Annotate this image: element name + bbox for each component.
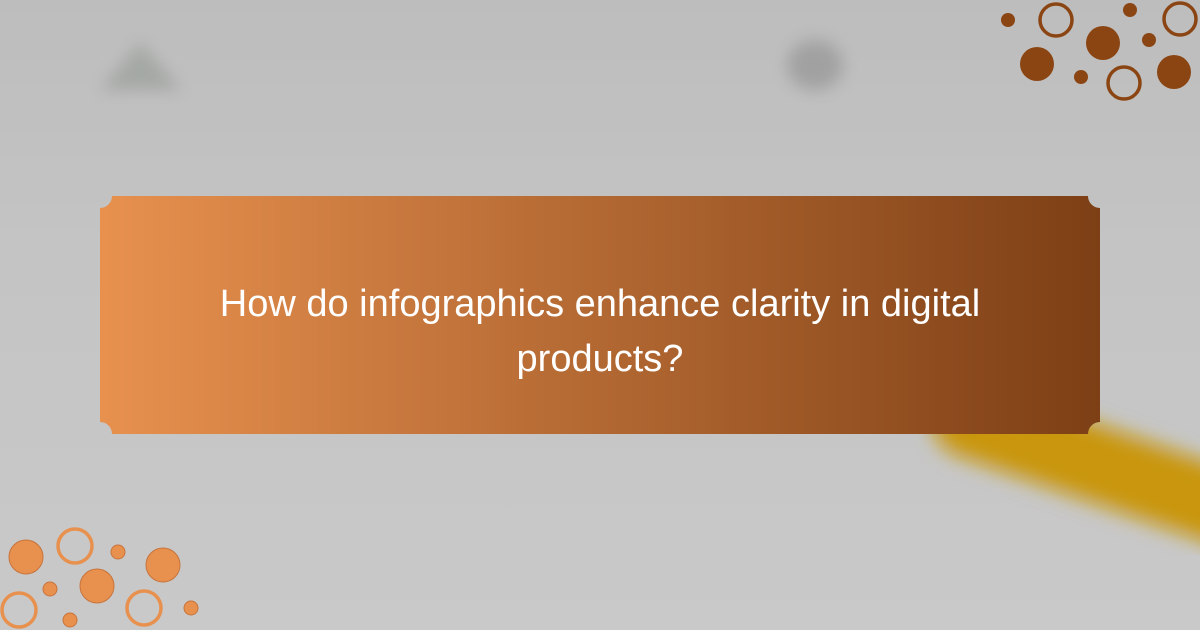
title: products? (517, 338, 683, 380)
title: How do infographics enhance clarity in digital (220, 283, 980, 325)
decoration: bottom-left circles (0, 527, 198, 629)
title (220, 283, 980, 380)
yellow streak (970, 420, 1200, 510)
banner (100, 196, 1100, 434)
decoration: top-right circles (1001, 1, 1198, 101)
